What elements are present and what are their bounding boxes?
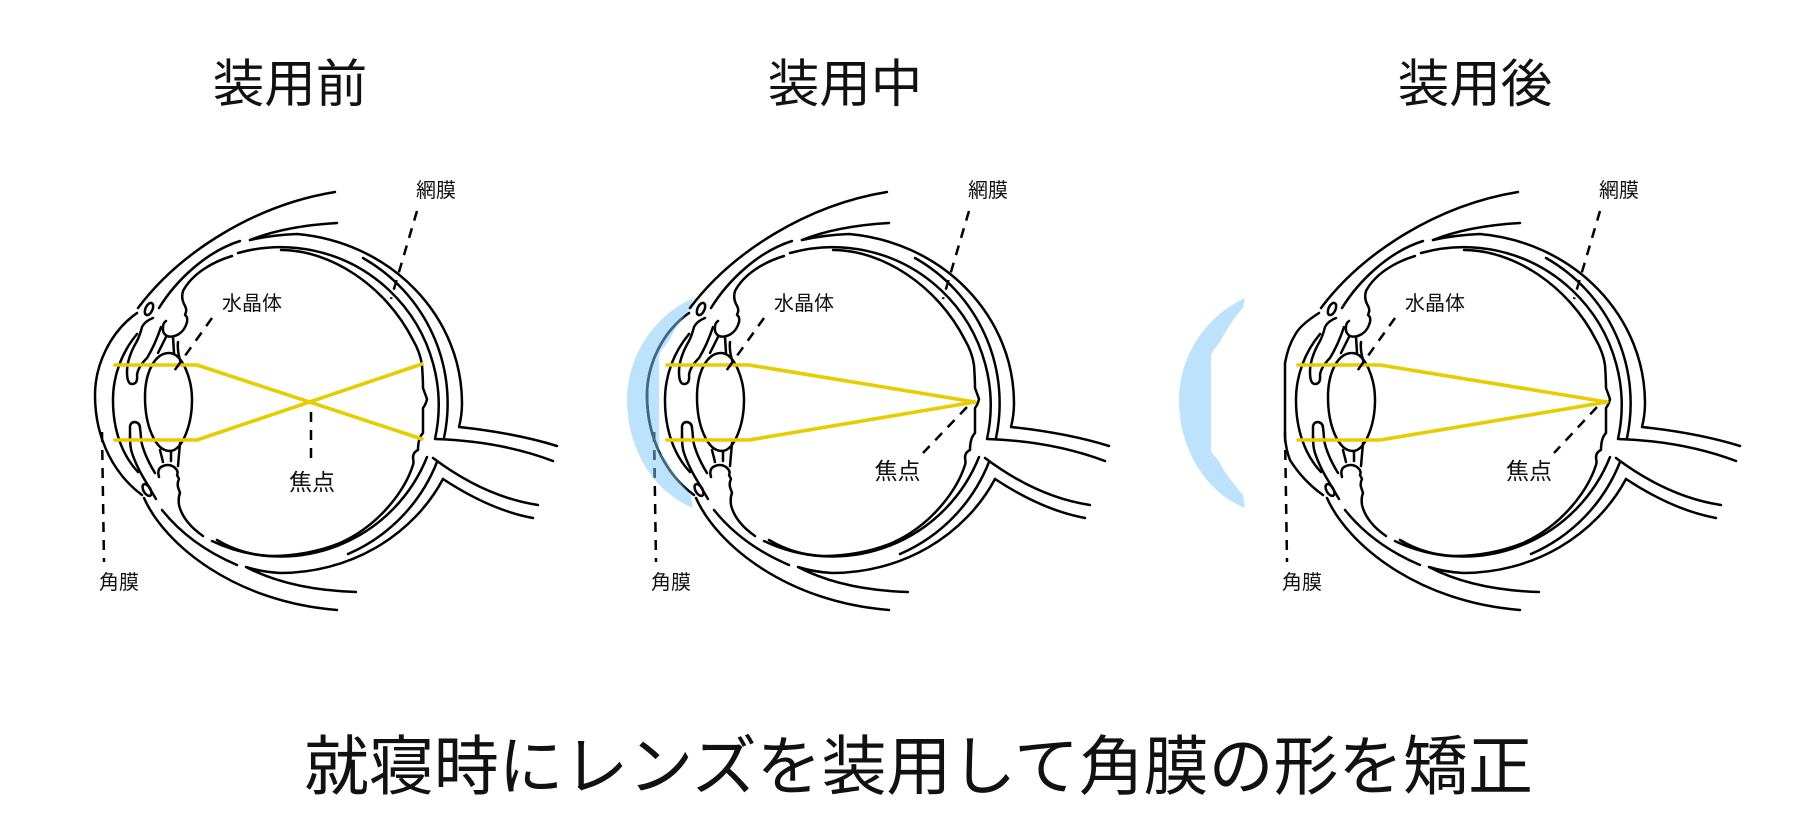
label: cornea: 角膜 — [1282, 571, 1322, 594]
leader: focal point — [1554, 407, 1597, 453]
panel: eye during wearing — [627, 179, 1109, 610]
leader: cornea — [1285, 432, 1287, 562]
leader: crystalline lens — [1355, 318, 1395, 374]
cornea and leader seen through the contact lens — [646, 312, 689, 493]
leader: cornea — [102, 432, 104, 562]
panel: eye after wearing — [1282, 179, 1740, 610]
leader: crystalline lens — [172, 318, 212, 374]
label: cornea: 角膜 — [651, 571, 691, 594]
leader: cornea — [654, 432, 656, 562]
light rays focused on retina — [1298, 365, 1607, 440]
light rays focused on retina — [667, 365, 975, 440]
eye anatomy line drawing — [647, 192, 1109, 610]
contact lens — [627, 298, 693, 508]
label: focal point: 焦点 — [874, 458, 920, 484]
label: crystalline lens: 水晶体 — [222, 292, 282, 315]
panel: eye before wearing — [95, 179, 557, 610]
leader: retina — [943, 211, 969, 299]
leader: focal point — [923, 407, 967, 453]
eye anatomy line drawing with flattened cornea — [1285, 192, 1740, 610]
label: focal point: 焦点 — [1506, 458, 1552, 484]
leader: retina — [391, 211, 417, 299]
heading: before wearing: 装用前 — [213, 55, 367, 113]
label: retina: 網膜 — [1599, 179, 1639, 202]
eye anatomy line drawing — [95, 192, 557, 610]
label: crystalline lens: 水晶体 — [1405, 292, 1465, 315]
heading: after wearing: 装用後 — [1398, 55, 1552, 113]
leader: focal point — [310, 412, 312, 463]
contact lens removed — [1179, 298, 1245, 508]
label: crystalline lens: 水晶体 — [774, 292, 834, 315]
label: retina: 網膜 — [416, 179, 456, 202]
leader: retina — [1574, 211, 1600, 299]
leader: crystalline lens — [724, 318, 764, 374]
heading: during wearing: 装用中 — [768, 55, 922, 113]
light rays crossing in front of retina — [115, 364, 422, 440]
label: focal point: 焦点 — [289, 469, 335, 495]
caption: 就寝時にレンズを装用して角膜の形を矯正 — [304, 730, 1533, 803]
label: retina: 網膜 — [968, 179, 1008, 202]
label: cornea: 角膜 — [99, 571, 139, 594]
